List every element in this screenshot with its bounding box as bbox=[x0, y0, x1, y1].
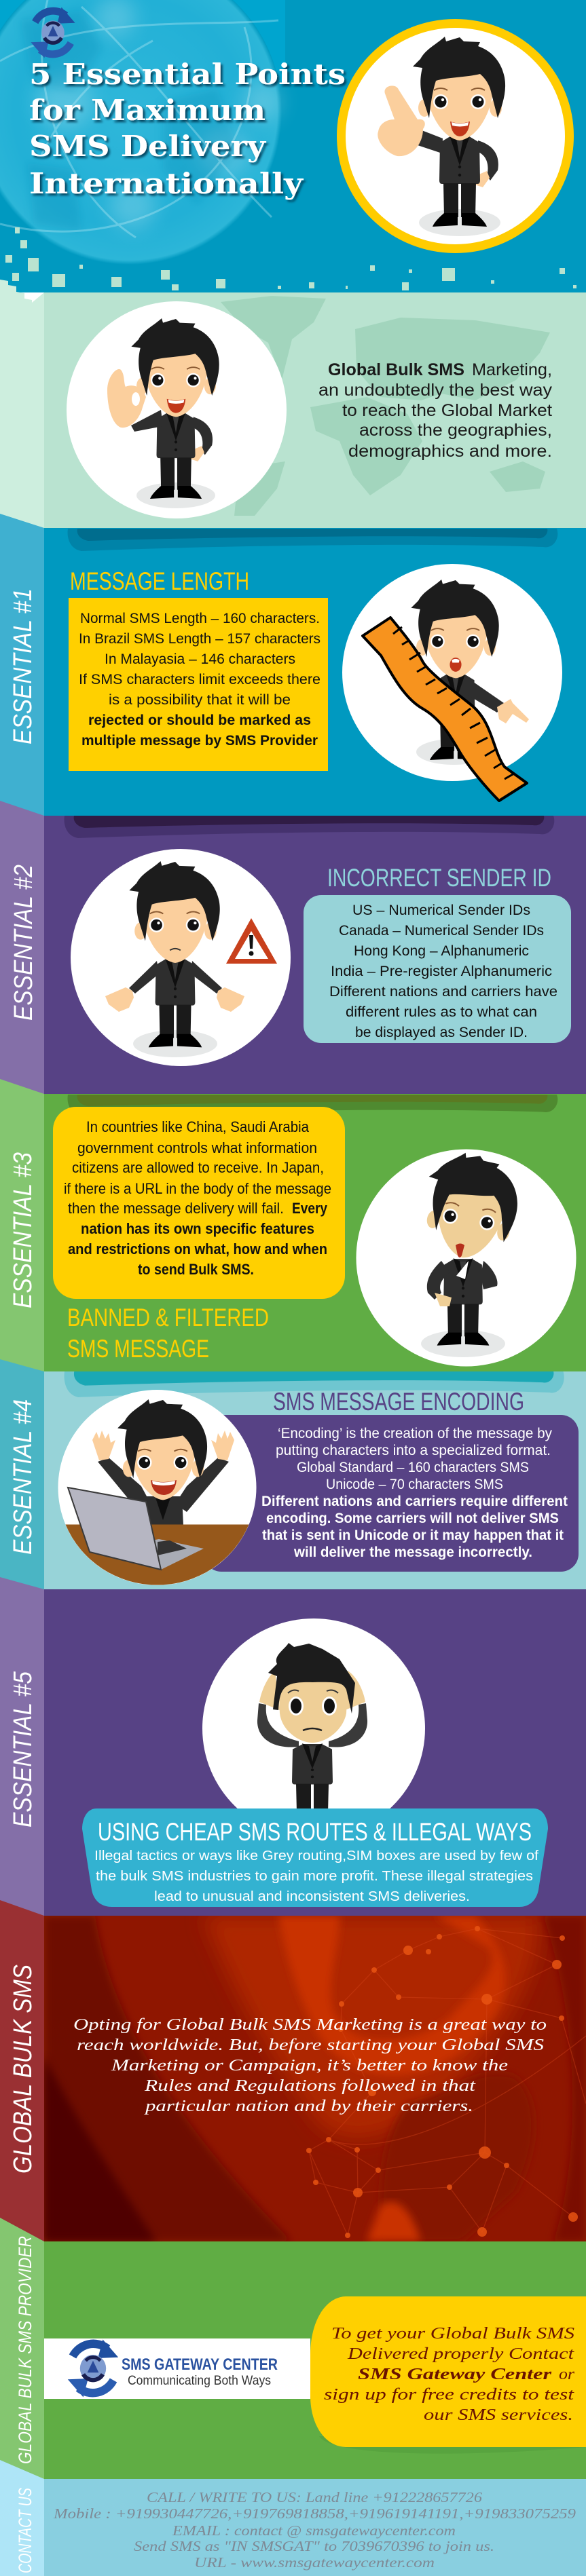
purple text box: Different nations and carriers require different bbox=[261, 1494, 568, 1509]
title: for Maximum bbox=[29, 94, 265, 127]
teal text box: different rules as to what can bbox=[346, 1004, 537, 1020]
purple text box: will deliver the message incorrectly. bbox=[293, 1545, 532, 1560]
company logo bbox=[68, 2340, 278, 2397]
title: Internationally bbox=[29, 167, 304, 200]
yellow text box: government controls what information bbox=[77, 1139, 317, 1156]
yellow text box: to send Bulk SMS. bbox=[138, 1261, 254, 1278]
body text: Illegal tactics or ways like Grey routing,SIM boxes are used by few of bbox=[94, 1849, 538, 1863]
left side strip bbox=[0, 280, 44, 2576]
yellow text box: Normal SMS Length – 160 characters. bbox=[80, 611, 320, 626]
body text: Rules and Regulations followed in that bbox=[144, 2077, 477, 2095]
panel: contact: URL - www.smsgatewaycenter.com bbox=[194, 2554, 435, 2571]
purple text box: Global Standard – 160 characters SMS bbox=[297, 1460, 529, 1475]
label: essential 1: ESSENTIAL #1 bbox=[9, 588, 37, 744]
network nodes bbox=[306, 1926, 578, 2238]
label: essential 5: ESSENTIAL #5 bbox=[9, 1671, 37, 1827]
yellow text box bbox=[69, 598, 328, 771]
panel: contact: CALL / WRITE TO US: Land line +912228657726 bbox=[147, 2489, 483, 2505]
teal text box: India – Pre-register Alphanumeric bbox=[331, 964, 552, 979]
company logo: Communicating Both Ways bbox=[128, 2374, 271, 2388]
laptop bbox=[68, 1488, 204, 1570]
decorative pixel squares bbox=[5, 227, 576, 290]
label: global bulk sms provider: GLOBAL BULK SMS PROVIDER bbox=[15, 2236, 35, 2464]
network lines bbox=[309, 1929, 586, 2235]
heading: BANNED & FILTERED bbox=[67, 1304, 269, 1331]
title: 5 Essential Points bbox=[29, 58, 346, 91]
teal text box: Hong Kong – Alphanumeric bbox=[354, 943, 529, 959]
panel: essential 3 banned and filtered bbox=[44, 1094, 586, 1371]
panel: essential 4 message encoding bbox=[44, 1371, 586, 1589]
body text: Marketing or Campaign, it’s better to know the bbox=[111, 2057, 508, 2075]
yellow text box: citizens are allowed to receive. In Japan, bbox=[72, 1159, 324, 1176]
title: SMS Delivery bbox=[29, 130, 267, 163]
yellow text box: In Brazil SMS Length – 157 characters bbox=[79, 631, 321, 647]
panel: header bbox=[0, 0, 586, 292]
yellow call to action: sign up for free credits to test bbox=[324, 2386, 575, 2404]
purple text box: Unicode – 70 characters SMS bbox=[326, 1477, 503, 1492]
panel: essential 2 incorrect sender id bbox=[44, 816, 586, 1094]
intro text bbox=[318, 360, 553, 461]
yellow text box: In Malayasia – 146 characters bbox=[105, 651, 295, 667]
world map bbox=[221, 296, 550, 516]
icon: confused man with warning sign bbox=[71, 849, 291, 1066]
icon: cheering man at laptop bbox=[58, 1390, 257, 1585]
panel: essential 1 message length bbox=[44, 528, 586, 816]
label: essential 2: ESSENTIAL #2 bbox=[10, 865, 38, 1021]
icon: surprised man bbox=[356, 1148, 576, 1367]
purple text box bbox=[204, 1415, 579, 1572]
teal text box bbox=[304, 895, 571, 1043]
yellow call to action: our SMS services. bbox=[424, 2406, 573, 2424]
yellow text box: then the message delivery will fail. bbox=[68, 1200, 284, 1217]
yellow call to action: SMS Gateway Center bbox=[358, 2366, 552, 2383]
purple text box: putting characters into a specialized format. bbox=[276, 1443, 551, 1458]
yellow text box: In countries like China, Saudi Arabia bbox=[86, 1118, 310, 1135]
icon: warning triangle bbox=[226, 918, 277, 964]
heading: MESSAGE LENGTH bbox=[70, 567, 249, 595]
label: essential 4: ESSENTIAL #4 bbox=[9, 1399, 37, 1555]
teal text box bbox=[82, 1808, 548, 1907]
company logo: SMS GATEWAY CENTER bbox=[122, 2355, 278, 2374]
icon: man pointing up in yellow ring bbox=[341, 23, 569, 248]
yellow text box: rejected or should be marked as bbox=[88, 713, 311, 728]
intro text: demographics and more. bbox=[348, 442, 552, 461]
yellow text box: multiple message by SMS Provider bbox=[81, 733, 318, 749]
teal text box: US – Numerical Sender IDs bbox=[352, 903, 530, 918]
intro text: Marketing, bbox=[472, 360, 552, 379]
label: essential 3: ESSENTIAL #3 bbox=[9, 1152, 37, 1308]
yellow text box: Every bbox=[292, 1200, 328, 1217]
panel: sms provider bbox=[43, 2241, 586, 2479]
teal text box: Canada – Numerical Sender IDs bbox=[339, 923, 544, 939]
teal text box: be displayed as Sender ID. bbox=[355, 1025, 528, 1040]
globe background bbox=[0, 0, 282, 265]
logo bbox=[31, 7, 75, 58]
yellow text box: If SMS characters limit exceeds there bbox=[79, 672, 321, 687]
yellow text box: nation has its own specific features bbox=[81, 1220, 314, 1237]
body text: lead to unusual and inconsistent SMS deliveries. bbox=[154, 1889, 470, 1904]
intro text: Global Bulk SMS bbox=[328, 360, 464, 379]
title bbox=[29, 58, 346, 200]
panel: contact bbox=[44, 2479, 586, 2576]
intro text: an undoubtedly the best way bbox=[318, 381, 553, 400]
ruler bbox=[363, 618, 527, 801]
heading bbox=[67, 1304, 269, 1363]
panel: contact: Send SMS as "IN SMSGAT" to 7039670396 to join us. bbox=[134, 2538, 494, 2554]
body text: the bulk SMS industries to gain more profit. These illegal strategies bbox=[96, 1869, 533, 1884]
label: global bulk sms: GLOBAL BULK SMS bbox=[9, 1965, 37, 2174]
intro text: to reach the Global Market bbox=[342, 401, 552, 420]
body text: particular nation and by their carriers. bbox=[143, 2098, 473, 2115]
intro text: across the geographies, bbox=[359, 421, 552, 440]
panel: contact: Mobile : +919930447726,+919769818858,+919619141191,+919833075259 bbox=[53, 2505, 576, 2522]
yellow text box: is a possibility that it will be bbox=[109, 692, 291, 708]
purple text box: ‘Encoding’ is the creation of the message by bbox=[278, 1426, 552, 1441]
teal text box: Different nations and carriers have bbox=[329, 984, 557, 1000]
icon: man with OK gesture bbox=[67, 301, 287, 518]
panel: contact: EMAIL : contact @ smsgatewaycenter.com bbox=[172, 2522, 456, 2539]
label: contact us: CONTACT US bbox=[15, 2488, 35, 2573]
panel: intro bbox=[44, 292, 586, 528]
heading: SMS MESSAGE bbox=[67, 1335, 209, 1363]
purple text box: that is sent in Unicode or it may happen that it bbox=[262, 1528, 564, 1543]
table bbox=[65, 1524, 249, 1585]
purple text box: encoding. Some carriers will not deliver SMS bbox=[266, 1511, 559, 1526]
yellow text box: if there is a URL in the body of the message bbox=[64, 1180, 331, 1197]
panel: global bulk sms bbox=[44, 1916, 586, 2241]
yellow call to action: Delivered properly Contact bbox=[347, 2345, 575, 2363]
body text: Opting for Global Bulk SMS Marketing is a great way to bbox=[73, 2016, 547, 2034]
yellow text box bbox=[53, 1107, 345, 1299]
yellow call to action: or bbox=[559, 2366, 575, 2383]
icon: worried man holding head bbox=[202, 1618, 425, 1838]
yellow text box: and restrictions on what, how and when bbox=[68, 1240, 327, 1257]
panel: essential 5 cheap routes bbox=[44, 1589, 586, 1916]
body text: reach worldwide. But, before starting your Global SMS bbox=[77, 2037, 544, 2054]
yellow call to action bbox=[310, 2296, 586, 2447]
body text bbox=[94, 1849, 538, 1904]
yellow call to action: To get your Global Bulk SMS bbox=[331, 2325, 574, 2343]
icon: man with ruler bbox=[342, 564, 562, 801]
body text bbox=[73, 2016, 547, 2115]
